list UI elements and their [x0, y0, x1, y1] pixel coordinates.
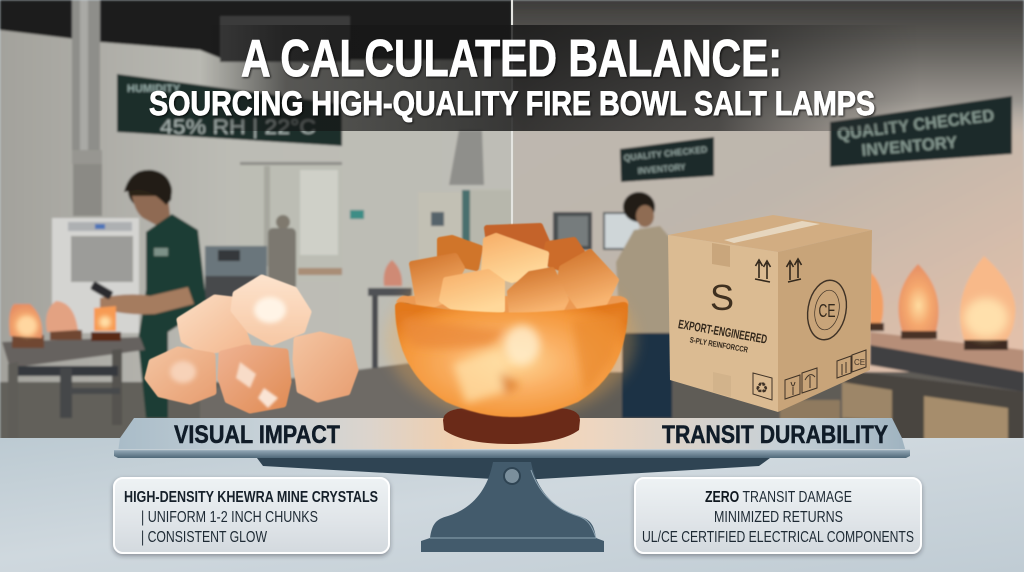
title: SOURCING HIGH-QUALITY FIRE BOWL SALT LAMPS — [149, 85, 875, 123]
CE certification stamp: CE — [818, 301, 836, 321]
panel: visual impact details: HIGH-DENSITY KHEWRA MINE CRYSTALS — [124, 489, 378, 506]
signs: QUALITY CHECKED — [623, 144, 708, 163]
export label: S-PLY REINFORCCR — [689, 335, 749, 354]
brand mark: S — [710, 277, 734, 318]
bottom panel — [0, 438, 1024, 572]
worker — [90, 170, 206, 418]
heading: transit durability: TRANSIT DURABILITY — [662, 421, 888, 449]
rear worker — [616, 192, 676, 418]
scale beam — [114, 418, 910, 552]
humidity sign: 45% RH | 22°C — [160, 116, 316, 139]
title: A CALCULATED BALANCE: — [241, 30, 782, 88]
base — [443, 408, 580, 444]
fulcrum — [421, 462, 604, 552]
bowl body — [395, 302, 628, 417]
bowl crystal patches — [400, 312, 625, 404]
heading: visual impact: VISUAL IMPACT — [174, 421, 340, 449]
infographic canvas: QUALITY CHECKED — [836, 106, 995, 144]
monitors — [553, 212, 639, 250]
platform — [118, 418, 906, 452]
humidity sign: HUMIDITY — [127, 83, 181, 95]
panel: transit durability details: ZERO TRANSIT DAMAGE — [705, 489, 852, 506]
handling icons — [753, 350, 866, 400]
infographic canvas: INVENTORY — [861, 133, 959, 160]
bowl back rim — [396, 296, 628, 318]
duct — [72, 0, 102, 216]
panel: transit durability details — [635, 478, 921, 553]
background lamps — [868, 256, 1015, 350]
title band — [200, 25, 920, 131]
panel: visual impact details: | CONSISTENT GLOW — [141, 529, 267, 546]
export label: EXPORT-ENGINEERED — [677, 317, 768, 347]
fire bowl lamp — [386, 226, 636, 444]
right shelf and cartons — [780, 332, 1024, 440]
platform lip — [114, 449, 910, 458]
seam between the two halves — [511, 0, 513, 226]
panel: visual impact details — [114, 478, 389, 553]
title — [149, 30, 875, 123]
panel: transit durability details: UL/CE CERTIFIED ELECTRICAL COMPONENTS — [642, 529, 914, 546]
panel: visual impact details: | UNIFORM 1-2 INCH CHUNKS — [141, 509, 318, 526]
chunks — [412, 226, 616, 314]
signs — [620, 137, 714, 182]
glow — [386, 260, 636, 420]
wall equipment — [418, 130, 512, 266]
back room window — [240, 162, 342, 290]
machine — [205, 246, 267, 306]
beam underside — [257, 458, 770, 479]
crystals pile — [148, 278, 355, 410]
export label — [675, 317, 768, 357]
background: climate-controlled warehouse — [0, 0, 512, 440]
shipping carton — [668, 215, 872, 412]
humidity sign — [117, 74, 342, 146]
signs: INVENTORY — [637, 162, 686, 176]
table with lamps — [2, 301, 145, 438]
AC unit — [52, 218, 139, 333]
handling icons: ♻ — [755, 380, 768, 397]
back table with small lamp — [368, 260, 412, 368]
handling icons: CE — [854, 358, 865, 367]
teal wall label — [350, 210, 364, 219]
panel: transit durability details: MINIMIZED RETURNS — [714, 509, 843, 526]
CE certification stamp — [803, 277, 851, 343]
this side up arrows — [755, 259, 802, 282]
